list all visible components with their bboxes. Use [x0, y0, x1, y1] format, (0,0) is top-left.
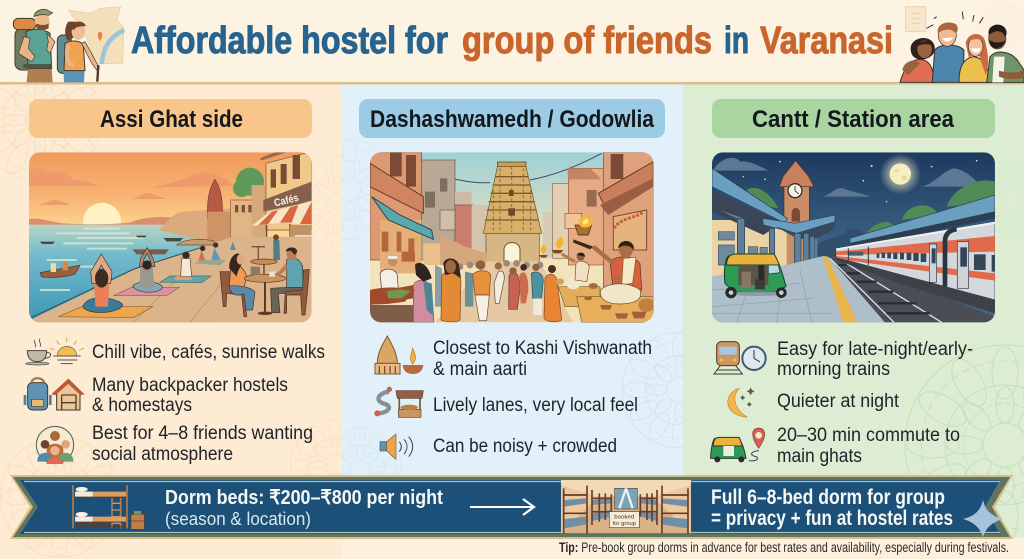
text: best for 4-8 friends — [92, 423, 313, 465]
text: quieter at night: Quieter at night — [777, 391, 900, 412]
right stalls — [558, 287, 600, 307]
heading pill: Dashashwamedh / Godowlia — [359, 99, 665, 138]
scene: Assi Ghat sunrise with yoga and cafe: Cafés — [273, 192, 300, 210]
image: dorm booked for group: for group — [613, 521, 636, 527]
panel: Cantt / Station area — [683, 84, 1024, 559]
map — [68, 7, 124, 64]
redhead woman — [959, 34, 990, 82]
heading pill: Assi Ghat side — [29, 99, 312, 138]
header illustration: group of friends — [900, 2, 1024, 82]
text: backpacker hostels: & homestays — [92, 395, 192, 416]
backpacker man — [13, 9, 55, 82]
list: Assi Ghat side — [25, 337, 325, 465]
woman left — [900, 38, 935, 82]
text: closest to Kashi Vishwanath: & main aarti — [433, 359, 527, 380]
scene: Dashashwamedh lane with temple and aarti — [370, 152, 655, 323]
title — [131, 20, 893, 62]
icon: auto rickshaw and pin — [711, 428, 765, 462]
panel: Dashashwamedh / Godowlia — [342, 84, 683, 475]
header divider — [0, 82, 1024, 84]
bottom strip behind tip — [342, 476, 1024, 559]
image: dorm booked for group: booked — [614, 514, 634, 520]
title: group of friends — [462, 20, 712, 62]
text: late-night trains: Easy for late-night/early- — [777, 339, 973, 360]
icon: backpack and house — [25, 378, 84, 410]
text: dorm bed price: Dorm beds: ₹200–₹800 per night — [165, 487, 443, 509]
text: full dorm for group — [711, 486, 953, 530]
icon: loudspeaker — [380, 434, 413, 459]
heading pill: Assi Ghat side: Assi Ghat side — [100, 106, 243, 133]
text: best for 4-8 friends: social atmosphere — [92, 444, 233, 465]
text: commute to ghats — [777, 425, 960, 467]
header illustration: backpackers and map — [13, 7, 124, 82]
title: Affordable hostel for — [131, 20, 448, 62]
text: chill vibe: Chill vibe, cafés, sunrise walks — [92, 342, 325, 363]
heading pill: Dashashwamedh / Godowlia: Dashashwamedh / Godowlia — [370, 106, 655, 133]
image: dorm booked for group — [561, 480, 691, 533]
text: backpacker hostels — [92, 375, 288, 416]
icon: lane and market stall — [374, 387, 423, 417]
icon: bunk bed and nightstand — [73, 485, 144, 529]
crowd — [457, 260, 543, 270]
auto rickshaw — [724, 254, 787, 298]
list: Cantt / Station area — [711, 339, 973, 467]
decorative background building — [906, 7, 926, 32]
icon: coffee cup and sunrise — [26, 337, 84, 365]
list: Dashashwamedh / Godowlia — [374, 336, 652, 459]
man blue shirt — [932, 22, 964, 82]
heading pill: Cantt / Station area — [712, 99, 995, 138]
title: Varanasi — [760, 20, 893, 62]
text: late-night trains — [777, 339, 973, 380]
text: lively lanes: Lively lanes, very local feel — [433, 395, 638, 416]
scene: Cantt railway station at night — [712, 152, 995, 322]
text: late-night trains: morning trains — [777, 359, 890, 380]
cheer marks — [927, 12, 983, 28]
text: closest to Kashi Vishwanath: Closest to Kashi Vishwanath — [433, 338, 652, 359]
text: backpacker hostels: Many backpacker hostels — [92, 375, 288, 396]
icon: train and clock — [714, 342, 766, 374]
text: closest to Kashi Vishwanath — [433, 338, 652, 380]
icon: group of friends — [36, 426, 74, 464]
text: full dorm for group: = privacy + fun at hostel rates — [711, 507, 953, 530]
arrow — [470, 499, 534, 515]
title: in — [724, 20, 749, 62]
map pin — [98, 32, 102, 41]
backpacker woman — [57, 21, 99, 82]
man green shirt — [987, 25, 1024, 82]
scene: Assi Ghat sunrise with yoga and cafe — [29, 152, 312, 322]
icon: temple and diya — [375, 336, 423, 374]
panel: Assi Ghat side — [0, 84, 342, 559]
text: dorm bed price: (season & location) — [165, 509, 311, 529]
text: best for 4-8 friends: Best for 4–8 friends wanting — [92, 423, 313, 444]
text: dorm bed price — [165, 487, 443, 529]
icon: four-point star — [963, 500, 1003, 537]
text: commute to ghats: 20–30 min commute to — [777, 425, 960, 446]
text: noisy and crowded: Can be noisy + crowded — [433, 436, 617, 457]
text: full dorm for group: Full 6–8-bed dorm for group — [711, 486, 945, 509]
river on map — [102, 30, 124, 64]
text: commute to ghats: main ghats — [777, 446, 862, 467]
header background — [0, 0, 1024, 84]
heading pill: Cantt / Station area: Cantt / Station area — [752, 106, 955, 133]
icon: crescent moon and stars — [728, 387, 755, 417]
banner: pricing ribbon — [10, 475, 1013, 539]
